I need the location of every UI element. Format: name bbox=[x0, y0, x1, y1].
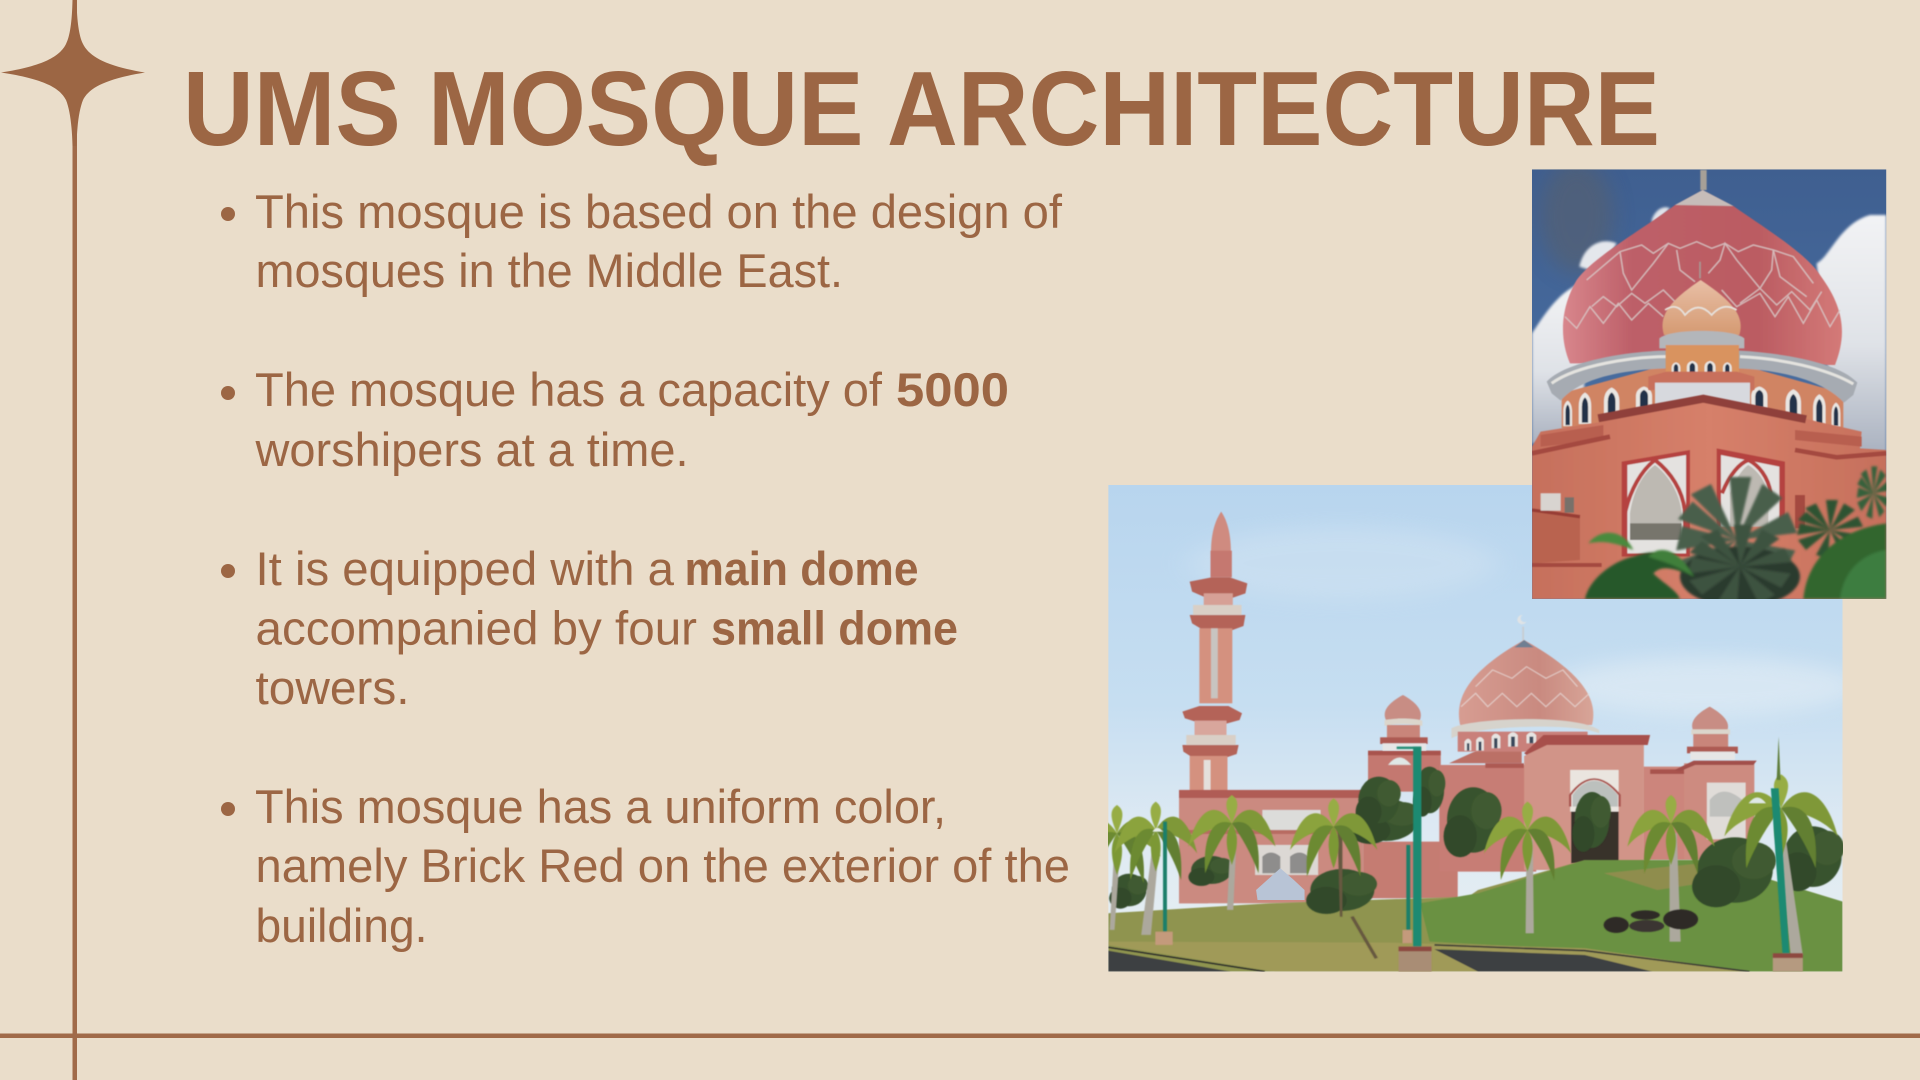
lawn and road bbox=[1108, 860, 1843, 972]
bullet 3: It is equipped with a bbox=[256, 542, 675, 595]
white tent bbox=[1256, 868, 1305, 900]
bullet 3 bbox=[221, 542, 958, 714]
title: UMS MOSQUE ARCHITECTURE bbox=[183, 50, 1660, 168]
bullet 4: building. bbox=[256, 899, 428, 952]
main dome bbox=[1451, 615, 1599, 752]
small dome tower bbox=[1648, 262, 1754, 406]
bullet 4: This mosque has a uniform color, bbox=[255, 780, 946, 833]
bullet 3: main dome bbox=[684, 542, 918, 595]
bullet 2: worshipers at a time. bbox=[255, 423, 688, 476]
drum and ring bbox=[1547, 351, 1857, 428]
main dome bbox=[1563, 170, 1842, 365]
bullet 1: mosques in the Middle East. bbox=[256, 244, 843, 297]
minaret bbox=[1182, 512, 1247, 819]
bullet 3: small dome bbox=[711, 602, 958, 654]
bullet 2 bbox=[221, 363, 1009, 476]
dark blue sky bbox=[1532, 160, 1886, 599]
bullet list bbox=[221, 185, 1070, 952]
photo: dome close-up bbox=[1532, 160, 1890, 607]
palms bbox=[1585, 466, 1890, 607]
mosque building bbox=[1179, 750, 1757, 903]
vertical rule bbox=[72, 0, 77, 1080]
horizontal rule bbox=[0, 1034, 1920, 1038]
small domes bbox=[1380, 695, 1738, 760]
trees and palms bbox=[1073, 767, 1844, 958]
central portal block bbox=[1524, 735, 1650, 870]
bullet 1 bbox=[221, 185, 1063, 297]
street lamps bbox=[1152, 737, 1803, 972]
bullet 4 bbox=[221, 780, 1070, 952]
photo: full mosque view bbox=[1073, 485, 1861, 972]
bullet 4: namely Brick Red on the exterior of the bbox=[256, 839, 1070, 892]
bullet 1: This mosque is based on the design of bbox=[255, 185, 1063, 238]
sky bbox=[1108, 485, 1861, 972]
icon: four-point star bbox=[1, 0, 145, 146]
bullet 2: 5000 bbox=[896, 363, 1009, 416]
bullet 3: accompanied by four bbox=[256, 602, 697, 654]
clouds bbox=[1532, 207, 1886, 452]
bullet 3: towers. bbox=[256, 661, 410, 714]
bullet 2: The mosque has a capacity of bbox=[255, 363, 883, 416]
lower facade bbox=[1532, 398, 1886, 599]
